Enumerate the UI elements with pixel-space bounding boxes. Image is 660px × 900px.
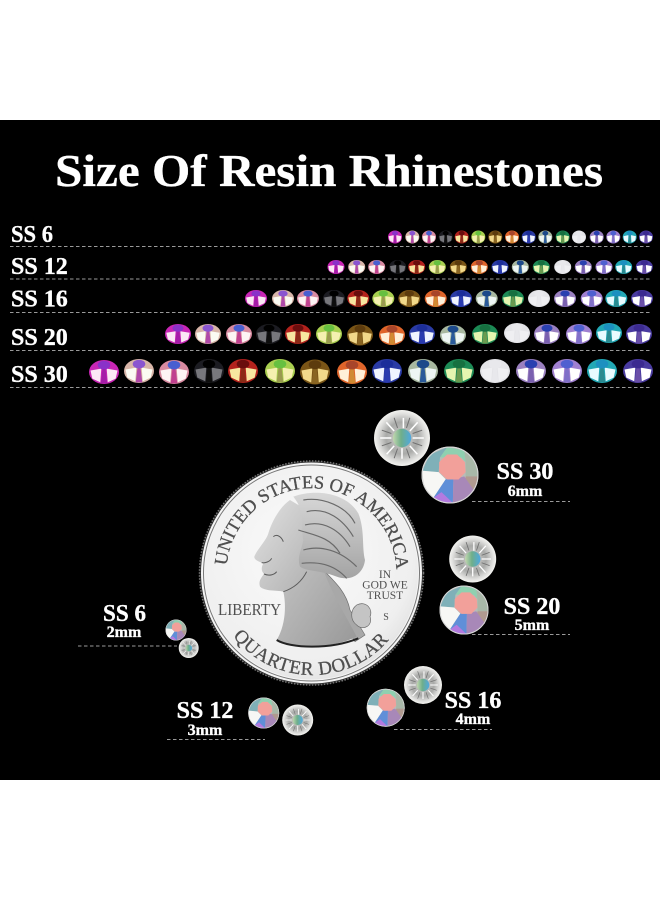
row label: SS 12: SS 12 — [11, 254, 68, 280]
rhinestones: SS 30 clear and AB pair — [374, 410, 478, 504]
label: SS 20 5mm: 5mm — [515, 617, 550, 634]
row: SS 16 rhinestones — [245, 290, 653, 307]
label: SS 20 5mm: SS 20 — [504, 594, 560, 620]
label: SS 12 3mm: SS 12 — [177, 698, 233, 724]
coin lettering: IN GOD WE TRUST: IN — [379, 569, 392, 581]
label: SS 20 5mm — [504, 594, 560, 634]
coin lettering: IN GOD WE TRUST — [362, 569, 408, 602]
coin lettering: IN GOD WE TRUST: GOD WE — [362, 580, 408, 592]
label: SS 12 3mm: 3mm — [188, 722, 223, 739]
label: SS 6 2mm: SS 6 — [103, 601, 146, 627]
rhinestones: SS 6 AB and clear pair — [166, 620, 199, 658]
label: SS 30 6mm — [497, 459, 553, 500]
label: SS 16 4mm — [445, 688, 501, 728]
panel: black background — [0, 120, 660, 780]
title: Size Of Resin Rhinestones — [55, 146, 603, 196]
coin lettering: UNITED STATES OF AMERICA: UNITED STATES OF AMERICA — [214, 476, 408, 570]
label: SS 30 6mm: SS 30 — [497, 459, 553, 485]
row: SS 12 rhinestones — [328, 260, 653, 274]
coin lettering: QUARTER DOLLAR: QUARTER DOLLAR — [235, 630, 389, 676]
rhinestones: SS 12 AB and clear pair — [248, 698, 313, 736]
rhinestones: SS 16 clear and AB pair — [367, 666, 442, 727]
label: SS 30 6mm: 6mm — [508, 483, 543, 500]
row: SS 30 rhinestones — [89, 359, 653, 384]
row label: SS 16: SS 16 — [11, 286, 68, 312]
row label: SS 20: SS 20 — [11, 325, 68, 351]
label: SS 6 2mm — [103, 601, 146, 641]
row label: SS 30: SS 30 — [11, 362, 68, 388]
row label: SS 6: SS 6 — [11, 222, 53, 248]
label: SS 6 2mm: 2mm — [107, 624, 142, 641]
label: SS 16 4mm: SS 16 — [445, 688, 501, 714]
coin lettering: IN GOD WE TRUST: TRUST — [367, 590, 403, 602]
label: SS 12 3mm — [177, 698, 233, 739]
row: SS 20 rhinestones — [165, 323, 652, 346]
row: SS 6 rhinestones — [388, 230, 653, 244]
coin lettering: mint mark S: S — [383, 612, 389, 623]
coin portrait: Washington bust — [254, 493, 371, 647]
coin: US quarter dollar — [198, 460, 424, 686]
label: SS 16 4mm: 4mm — [456, 711, 491, 728]
rhinestones: SS 20 clear and AB pair — [440, 536, 496, 634]
coin lettering: LIBERTY: LIBERTY — [218, 600, 281, 619]
